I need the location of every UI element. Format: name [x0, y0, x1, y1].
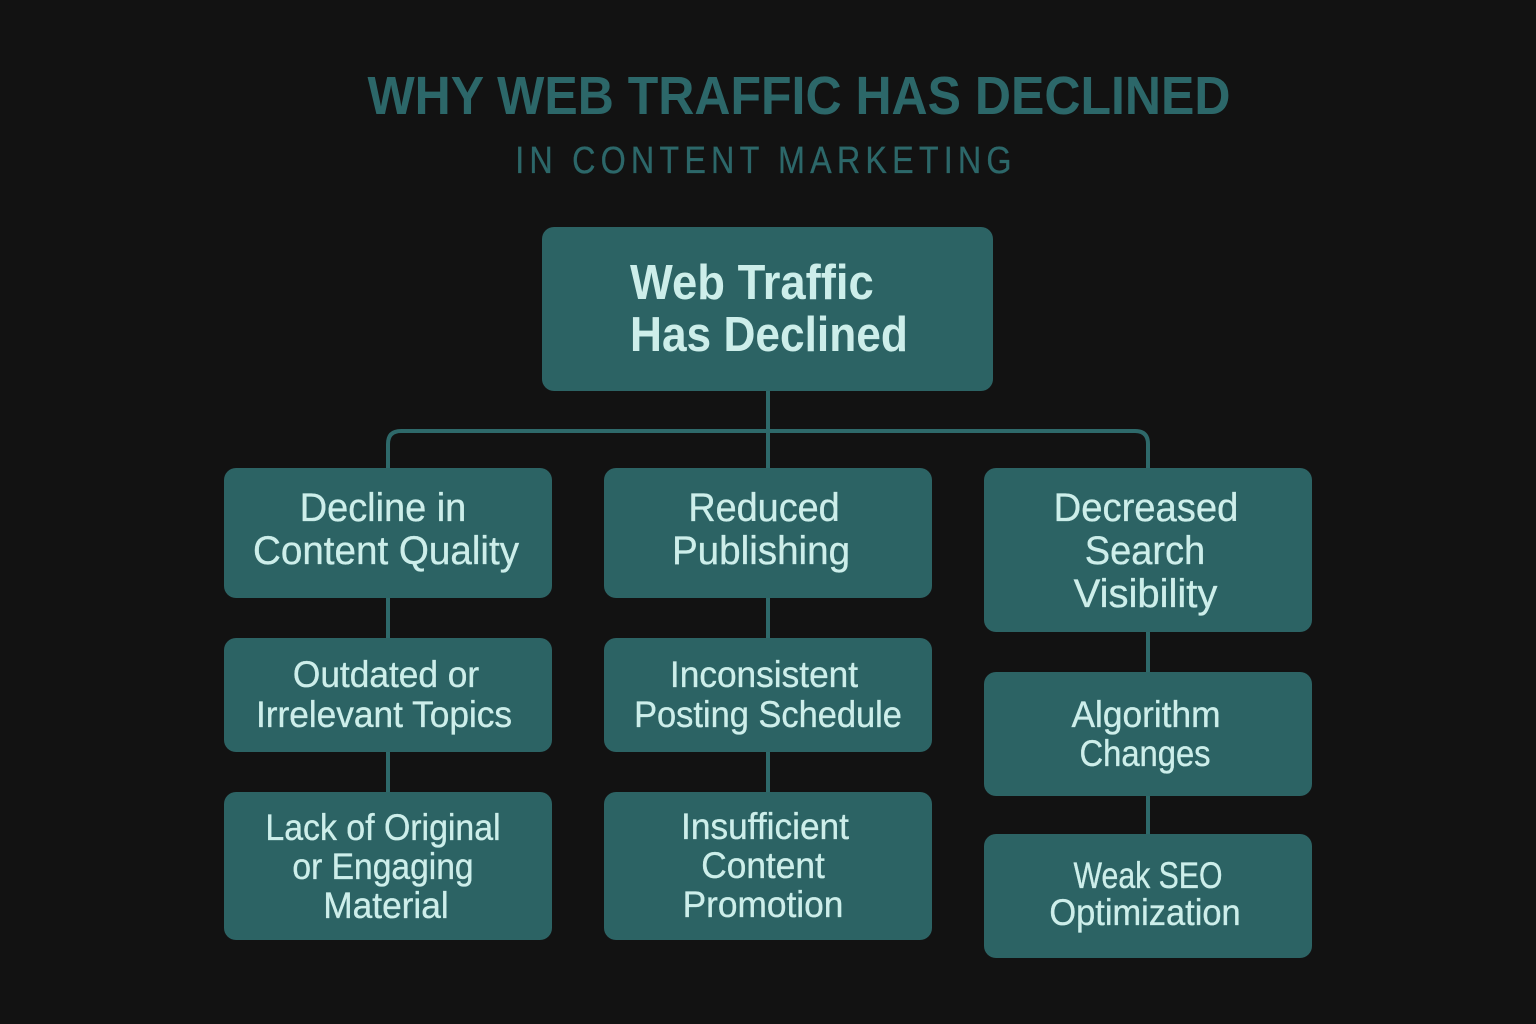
subtitle: IN CONTENT MARKETING: [515, 140, 1017, 182]
box: Reduced Publishing: Reduced: [688, 486, 839, 530]
box: Decline in Content Quality: Decline in: [300, 486, 466, 530]
box: Insufficient Content Promotion: Promotion: [683, 884, 843, 925]
box: Lack of Original or Engaging Material: Material: [323, 885, 449, 926]
box: Decreased Search Visibility: Decreased: [1054, 486, 1238, 530]
box: Decreased Search Visibility: [984, 468, 1312, 632]
root box: Web Traffic Has Declined: [542, 227, 993, 391]
box: Weak SEO Optimization: [984, 834, 1312, 958]
box: Decline in Content Quality: [224, 468, 552, 598]
box: Inconsistent Posting Schedule: Inconsistent: [670, 654, 858, 695]
root box: Web Traffic Has Declined: Web Traffic: [630, 256, 874, 310]
box: Weak SEO Optimization: Weak SEO: [1073, 855, 1222, 896]
box: Reduced Publishing: [604, 468, 932, 598]
title: WHY WEB TRAFFIC HAS DECLINED: [367, 66, 1231, 126]
box: Algorithm Changes: [984, 672, 1312, 796]
box: Inconsistent Posting Schedule: Posting Schedule: [634, 694, 901, 735]
box: Inconsistent Posting Schedule: [604, 638, 932, 752]
box: Decreased Search Visibility: Visibility: [1074, 572, 1217, 616]
box: Weak SEO Optimization: Optimization: [1049, 892, 1240, 933]
box: Algorithm Changes: Changes: [1079, 733, 1210, 774]
box: Insufficient Content Promotion: [604, 792, 932, 940]
box: Lack of Original or Engaging Material: [224, 792, 552, 940]
box: Outdated or Irrelevant Topics: Irrelevant Topics: [256, 694, 512, 735]
box: Algorithm Changes: Algorithm: [1072, 694, 1220, 735]
box: Reduced Publishing: Publishing: [672, 529, 850, 573]
box: Outdated or Irrelevant Topics: Outdated or: [293, 654, 479, 695]
box: Decline in Content Quality: Content Quality: [253, 529, 519, 573]
box: Insufficient Content Promotion: Content: [701, 845, 825, 886]
box: Lack of Original or Engaging Material: or Engaging: [292, 846, 473, 887]
box: Lack of Original or Engaging Material: Lack of Original: [265, 807, 501, 848]
box: Insufficient Content Promotion: Insufficient: [681, 806, 849, 847]
box: Outdated or Irrelevant Topics: [224, 638, 552, 752]
root box: Web Traffic Has Declined: Has Declined: [630, 308, 908, 362]
box: Decreased Search Visibility: Search: [1085, 529, 1205, 573]
